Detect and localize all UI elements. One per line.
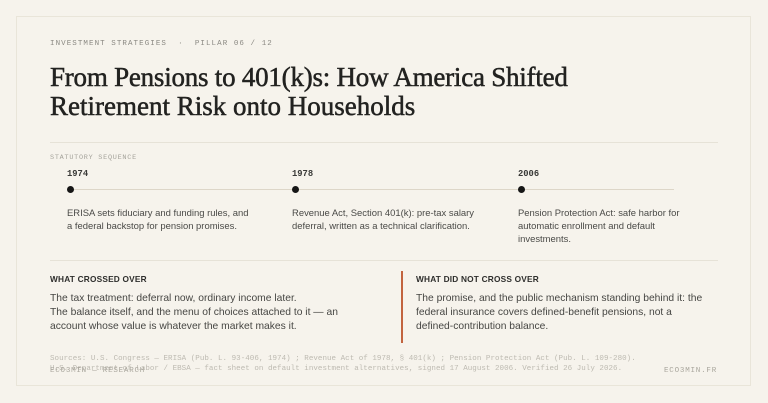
timeline axis: [70, 189, 674, 190]
accent divider: [401, 271, 403, 343]
event: 1978: [292, 169, 474, 232]
title: Retirement Risk onto Households: [50, 91, 415, 121]
event: 2006: investments.: [518, 234, 571, 245]
body text: [416, 293, 702, 332]
body text: The balance itself, and the menu of choices attached to it — an: [50, 307, 338, 318]
eyebrow: INVESTMENT STRATEGIES · PILLAR 06 / 12: [50, 40, 273, 48]
body text: [50, 293, 338, 332]
event: 1974: a federal backstop for pension promises.: [67, 221, 237, 232]
event: 1978: deferral, written as a technical clarification.: [292, 221, 470, 232]
title: [50, 62, 568, 121]
event: 1978: 1978: [292, 169, 313, 179]
body text: The tax treatment: deferral now, ordinary income later.: [50, 293, 297, 304]
body text: account whose value is whatever the market makes it.: [50, 321, 297, 332]
title: From Pensions to 401(k)s: How America Shifted: [50, 62, 568, 92]
heading: WHAT CROSSED OVER: [50, 274, 147, 284]
timeline: [67, 169, 680, 245]
body text: The promise, and the public mechanism standing behind it: the: [416, 293, 702, 304]
event: 2006: 2006: [518, 169, 539, 179]
panel: what did not cross over: [416, 274, 702, 332]
sources: U.S. Department of Labor / EBSA — fact sheet on default investment alternatives, signed 17 August 2006. Verified 26 July 2026.: [50, 365, 622, 373]
section label: statutory sequence: STATUTORY SEQUENCE: [50, 154, 137, 162]
event: 1974: ERISA sets fiduciary and funding rules, and: [67, 208, 249, 219]
panel: what crossed over: [50, 274, 338, 332]
event: 2006: automatic enrollment and default: [518, 221, 655, 232]
body text: defined-contribution balance.: [416, 321, 548, 332]
event: 2006: [518, 169, 680, 245]
heading: WHAT DID NOT CROSS OVER: [416, 274, 539, 284]
event: 1978: Revenue Act, Section 401(k): pre-tax salary: [292, 208, 474, 219]
event: 1974: [67, 169, 249, 232]
footer left: ECO3MIN — RESEARCH: [50, 367, 145, 375]
footer right: ECO3MIN.FR: [664, 367, 717, 375]
sources: Sources: U.S. Congress — ERISA (Pub. L. 93-406, 1974) ; Revenue Act of 1978, § 401(k) ; Pension Protection Act (Pub. L. 109-280).: [50, 355, 636, 363]
body text: federal insurance covers defined-benefit pensions, not a: [416, 307, 672, 318]
sources: [50, 354, 636, 373]
event: 2006: Pension Protection Act: safe harbor for: [518, 208, 680, 219]
event: 1974: 1974: [67, 169, 88, 179]
